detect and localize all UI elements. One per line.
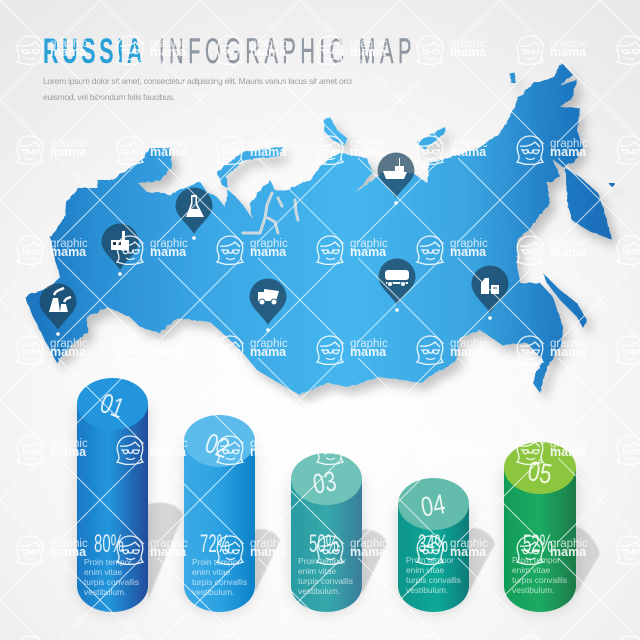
cylinder 04: 04 xyxy=(419,488,448,523)
cylinder 03: 50% xyxy=(309,530,339,558)
cylinder 04: vestibulum. xyxy=(406,585,448,595)
cylinder 01: enim vitae xyxy=(84,567,123,577)
pin: power plant xyxy=(40,284,76,336)
cylinder 01: 01 xyxy=(96,387,128,424)
cylinder 05: 52% xyxy=(523,530,553,558)
location pins xyxy=(40,152,508,336)
cylinder 04: 34% xyxy=(418,530,448,558)
intro text xyxy=(43,76,352,102)
pin: refinery xyxy=(472,266,508,320)
cast shadows xyxy=(147,503,600,600)
cylinder 02: 02 xyxy=(201,427,233,464)
cylinder 05: enim vitae xyxy=(512,565,551,575)
pin: dump truck xyxy=(250,278,286,332)
title: INFOGRAPHIC MAP xyxy=(159,32,416,71)
title xyxy=(43,32,416,71)
cylinder 01: vestibulum. xyxy=(84,587,126,597)
cylinder 04: Proin tempor xyxy=(406,555,454,565)
cylinder 04 xyxy=(398,478,469,612)
pin: flask xyxy=(176,188,212,240)
cylinder 02: 72% xyxy=(200,530,230,558)
pin: factory xyxy=(102,224,138,276)
cylinder 05: turpis convallis xyxy=(512,575,567,585)
cylinder 04: turpis convallis xyxy=(406,575,461,585)
intro text: Lorem ipsum dolor sit amet, consectetur adipiscing elit. Mauris varius lacus sit amet orci xyxy=(43,76,352,86)
cylinder 05 xyxy=(504,442,576,612)
cylinder 03: turpis convallis xyxy=(298,576,353,586)
cylinder 05: 05 xyxy=(525,455,554,490)
cylinder 04: enim vitae xyxy=(406,565,445,575)
cylinder 02: enim vitae xyxy=(192,567,231,577)
cylinder 02: turpis convallis xyxy=(192,577,247,587)
intro text: euismod, vel bibendum felis faucibus. xyxy=(43,92,175,102)
map gulfs xyxy=(243,193,298,233)
cylinder 03: Proin tempor xyxy=(298,556,346,566)
cylinder 01: turpis convallis xyxy=(84,577,139,587)
cylinder 03: vestibulum. xyxy=(298,586,340,596)
cylinder 05: Proin tempor xyxy=(512,555,560,565)
pin: tanker xyxy=(378,258,416,312)
cylinder 02: Proin tempor xyxy=(192,557,240,567)
pin: ship xyxy=(378,152,414,205)
title: RUSSIA xyxy=(43,32,146,71)
cylinder 02: vestibulum. xyxy=(192,587,234,597)
cylinder 01: 80% xyxy=(94,530,124,558)
cylinder 01 xyxy=(77,378,148,612)
cylinder 03: enim vitae xyxy=(298,566,337,576)
cylinder 01: Proin tempor xyxy=(84,557,132,567)
cylinder 05: vestibulum. xyxy=(512,585,554,595)
map of Russia xyxy=(25,63,615,395)
cylinder 03: 03 xyxy=(311,465,339,500)
cylinder 03 xyxy=(291,453,362,612)
cylinder 02 xyxy=(184,415,255,612)
